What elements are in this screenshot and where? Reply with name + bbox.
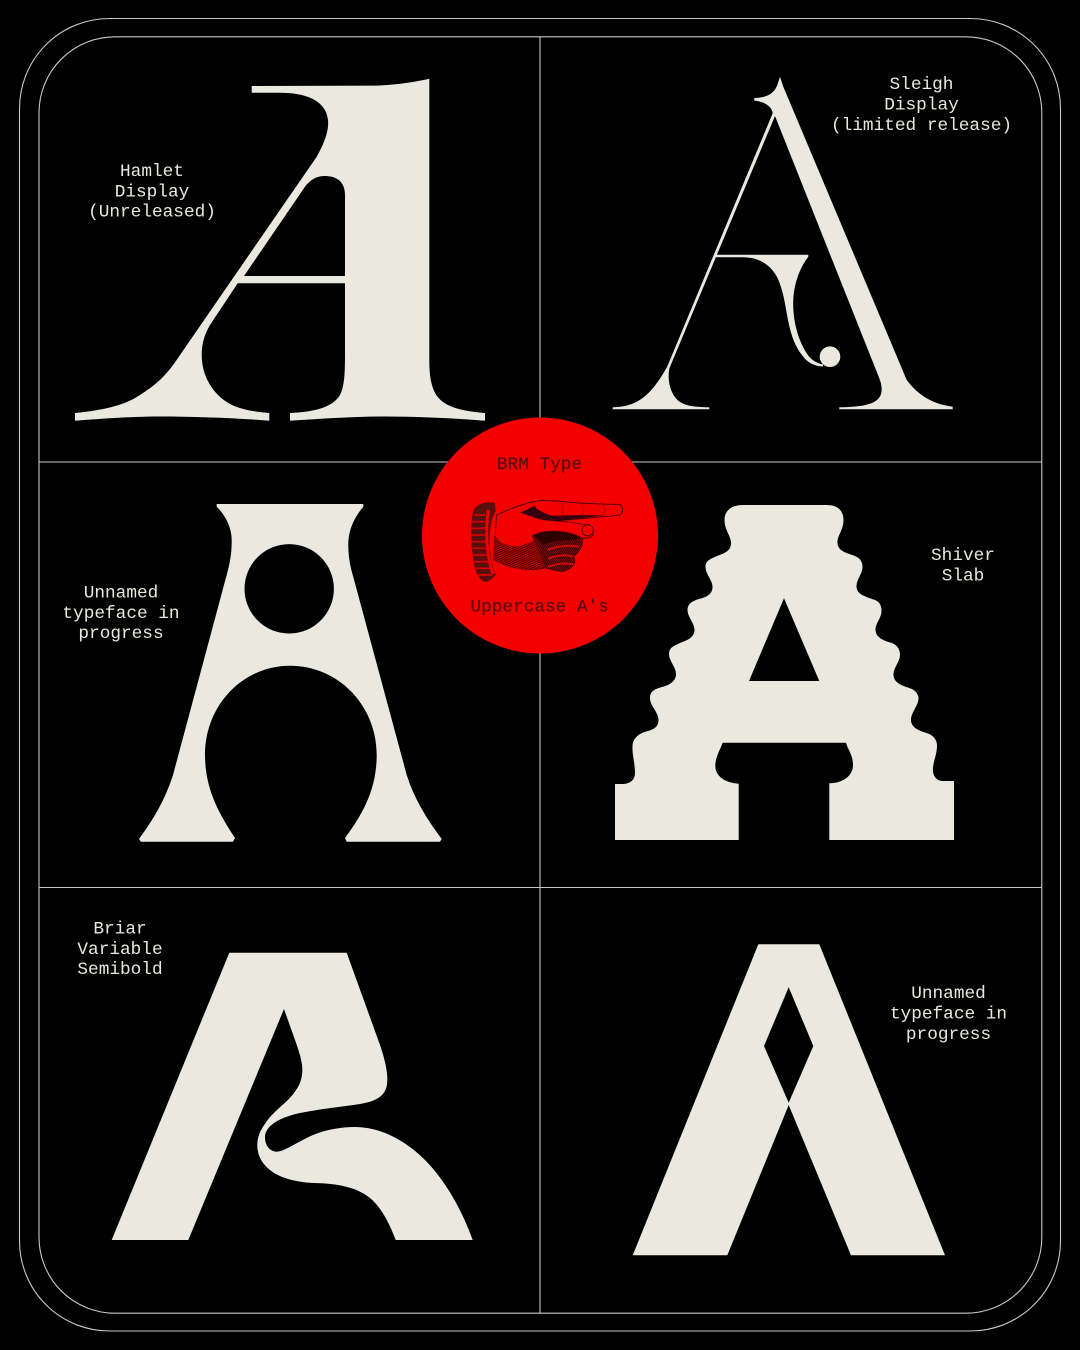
label: Shiver Slab: Shiver [931, 546, 995, 566]
label: unnamed typeface, right: progress [906, 1025, 991, 1045]
label: Sleigh Display: Display [884, 96, 959, 116]
letter: Hamlet Display A [75, 79, 485, 421]
label: Hamlet Display: Display [115, 182, 190, 202]
letter: Sleigh Display A [613, 77, 953, 409]
letter: Shiver Slab A [615, 505, 954, 840]
letter: Briar Variable Semibold A [112, 953, 473, 1240]
label: Hamlet Display: (Unreleased) [88, 203, 216, 223]
label: Briar Variable Semibold: Variable [77, 940, 163, 960]
label: Shiver Slab: Slab [942, 566, 984, 586]
label: unnamed typeface, left: progress [78, 624, 164, 644]
label: Hamlet Display: Hamlet [120, 162, 184, 182]
label: Briar Variable Semibold: Briar [93, 920, 147, 940]
label: unnamed typeface, left: Unnamed [84, 584, 158, 604]
label: unnamed typeface, right: Unnamed [911, 984, 986, 1004]
red centre badge [422, 418, 658, 654]
label: unnamed typeface, left: typeface in [62, 604, 180, 624]
letter: unnamed diamond A [633, 944, 945, 1255]
icon: pointing hand [471, 500, 623, 582]
label: unnamed typeface, right: typeface in [890, 1004, 1007, 1024]
badge caption: Uppercase A's: Uppercase A's [470, 598, 609, 618]
label: Sleigh Display: Sleigh [890, 75, 953, 95]
label: Sleigh Display: (limited release) [831, 116, 1012, 136]
badge heading: BRM Type: BRM Type [497, 455, 582, 475]
letter: unnamed arch A [139, 504, 442, 842]
label: Briar Variable Semibold: Semibold [77, 960, 163, 980]
